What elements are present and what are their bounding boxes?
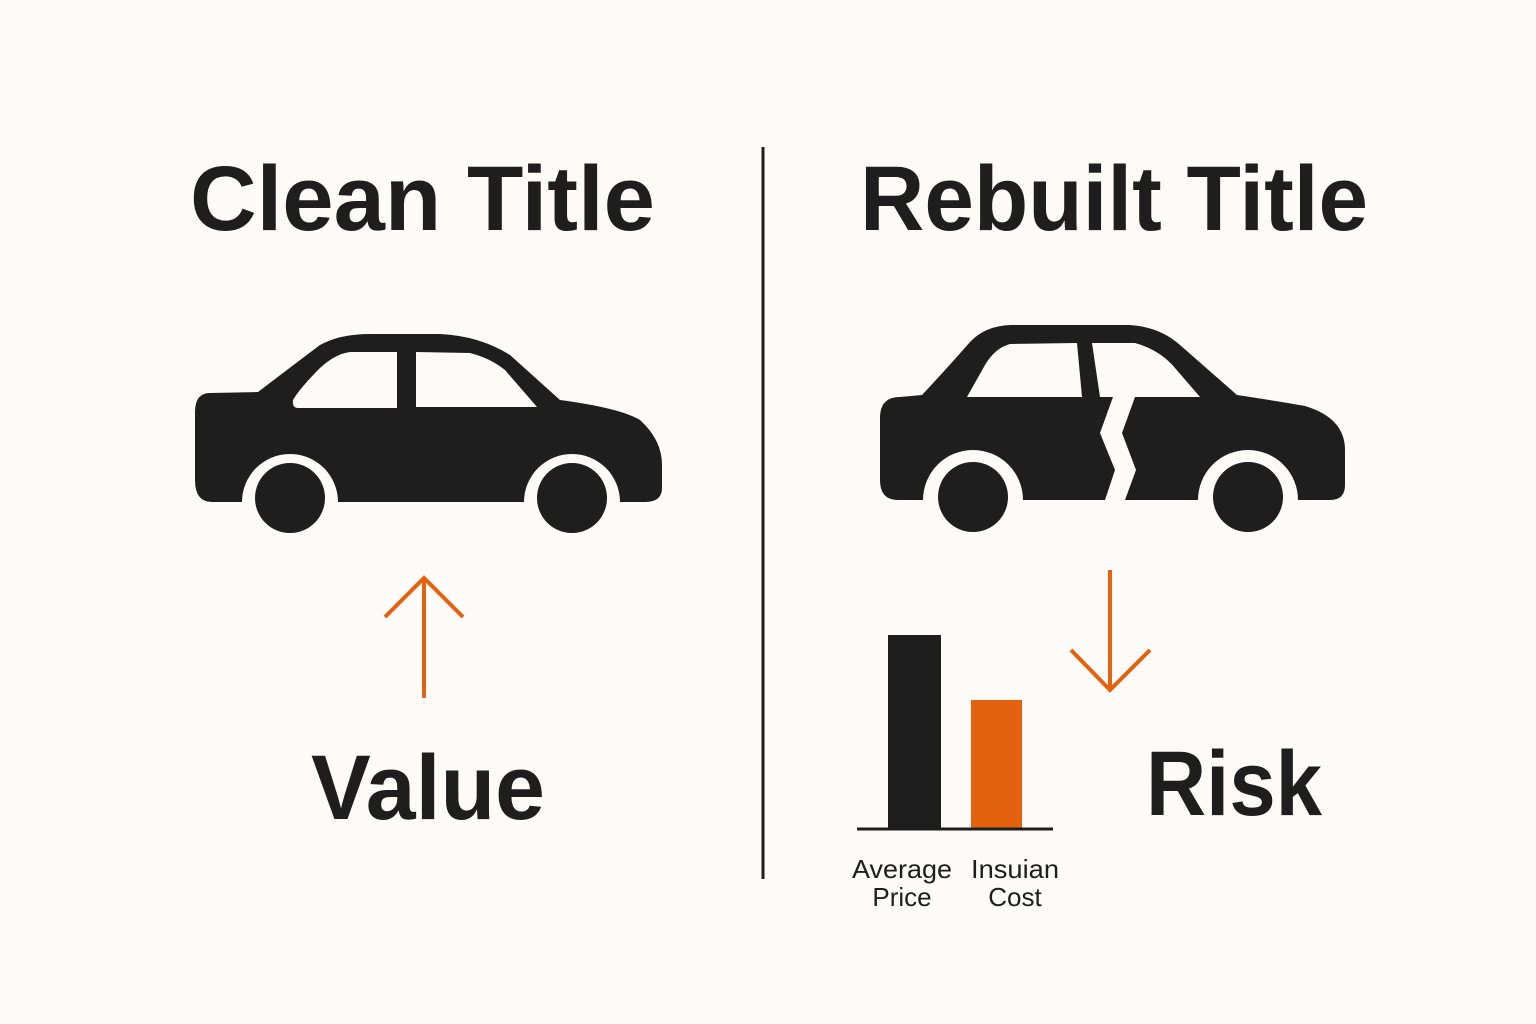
- bar chart: Cost: [988, 882, 1043, 912]
- bar chart: [852, 635, 1059, 912]
- label: Risk: Risk: [1146, 733, 1323, 835]
- bar chart: Price: [872, 882, 932, 912]
- title: Clean Title: Clean Title: [190, 148, 655, 250]
- icon: rebuilt car with crack: [880, 325, 1345, 532]
- arrow: down (risk): [1071, 570, 1150, 690]
- icon: clean car: [195, 334, 662, 533]
- title: Rebuilt Title: Rebuilt Title: [860, 148, 1368, 250]
- label: Value: Value: [311, 737, 545, 839]
- divider line: [762, 147, 764, 879]
- arrow: up (value): [385, 578, 463, 698]
- bar chart: Insuian: [971, 854, 1059, 884]
- bar chart: Average: [852, 854, 952, 884]
